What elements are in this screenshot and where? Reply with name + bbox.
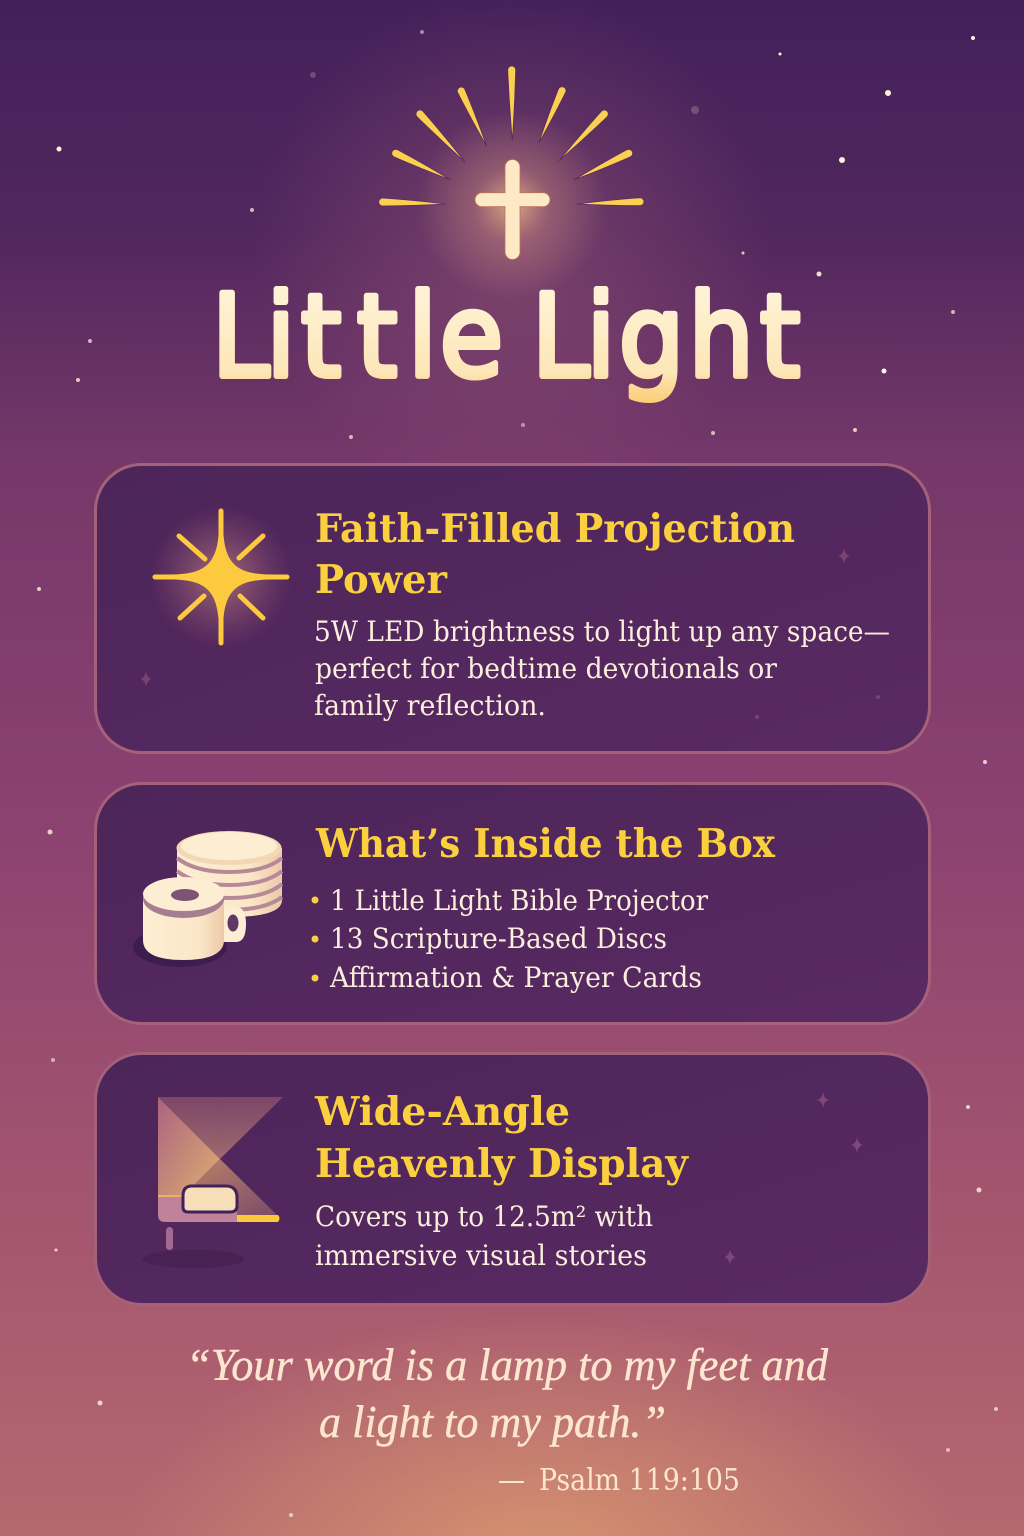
icon: glowing cross with rays: [379, 66, 644, 300]
decorative sparkles: [724, 1092, 863, 1265]
heading: Power: [315, 557, 447, 603]
bullet list: 1 Little Light Bible Projector: [330, 884, 709, 917]
icon: golden star: [149, 505, 293, 649]
panel: faith-filled projection power: [96, 464, 930, 752]
citation: Psalm 119:105: [539, 1463, 740, 1498]
icon: wide-angle projector: [142, 1097, 283, 1268]
bullet list: 13 Scripture-Based Discs: [330, 922, 667, 955]
bullet list: [312, 884, 709, 994]
heading: [315, 506, 795, 603]
bible quote: “Your word is a lamp to my feet and: [186, 1340, 828, 1390]
heading: Wide-Angle: [314, 1089, 570, 1135]
heading: Heavenly Display: [315, 1141, 689, 1187]
body text: [315, 1200, 653, 1272]
bullet list: Affirmation & Prayer Cards: [329, 961, 702, 994]
panel: what's inside the box: [96, 784, 930, 1024]
heading: Faith-Filled Projection: [315, 506, 795, 552]
icon: disc stack and projector cup: [133, 831, 282, 967]
body text: perfect for bedtime devotionals or: [315, 652, 778, 685]
body text: 5W LED brightness to light up any space—: [314, 615, 890, 648]
cross: [475, 160, 550, 260]
body text: family reflection.: [314, 689, 546, 722]
title: Little Light: [212, 270, 800, 403]
body text: [314, 615, 890, 722]
decorative sparkles: [140, 548, 880, 719]
body text: Covers up to 12.5m² with: [315, 1200, 653, 1233]
bible quote: [186, 1340, 828, 1498]
citation: —: [498, 1463, 525, 1498]
bible quote: a light to my path.”: [319, 1397, 666, 1447]
heading: What’s Inside the Box: [315, 821, 776, 867]
body text: immersive visual stories: [315, 1239, 647, 1272]
panel: wide-angle heavenly display: [96, 1054, 930, 1304]
sun rays: [379, 66, 644, 208]
heading: [314, 1089, 689, 1187]
